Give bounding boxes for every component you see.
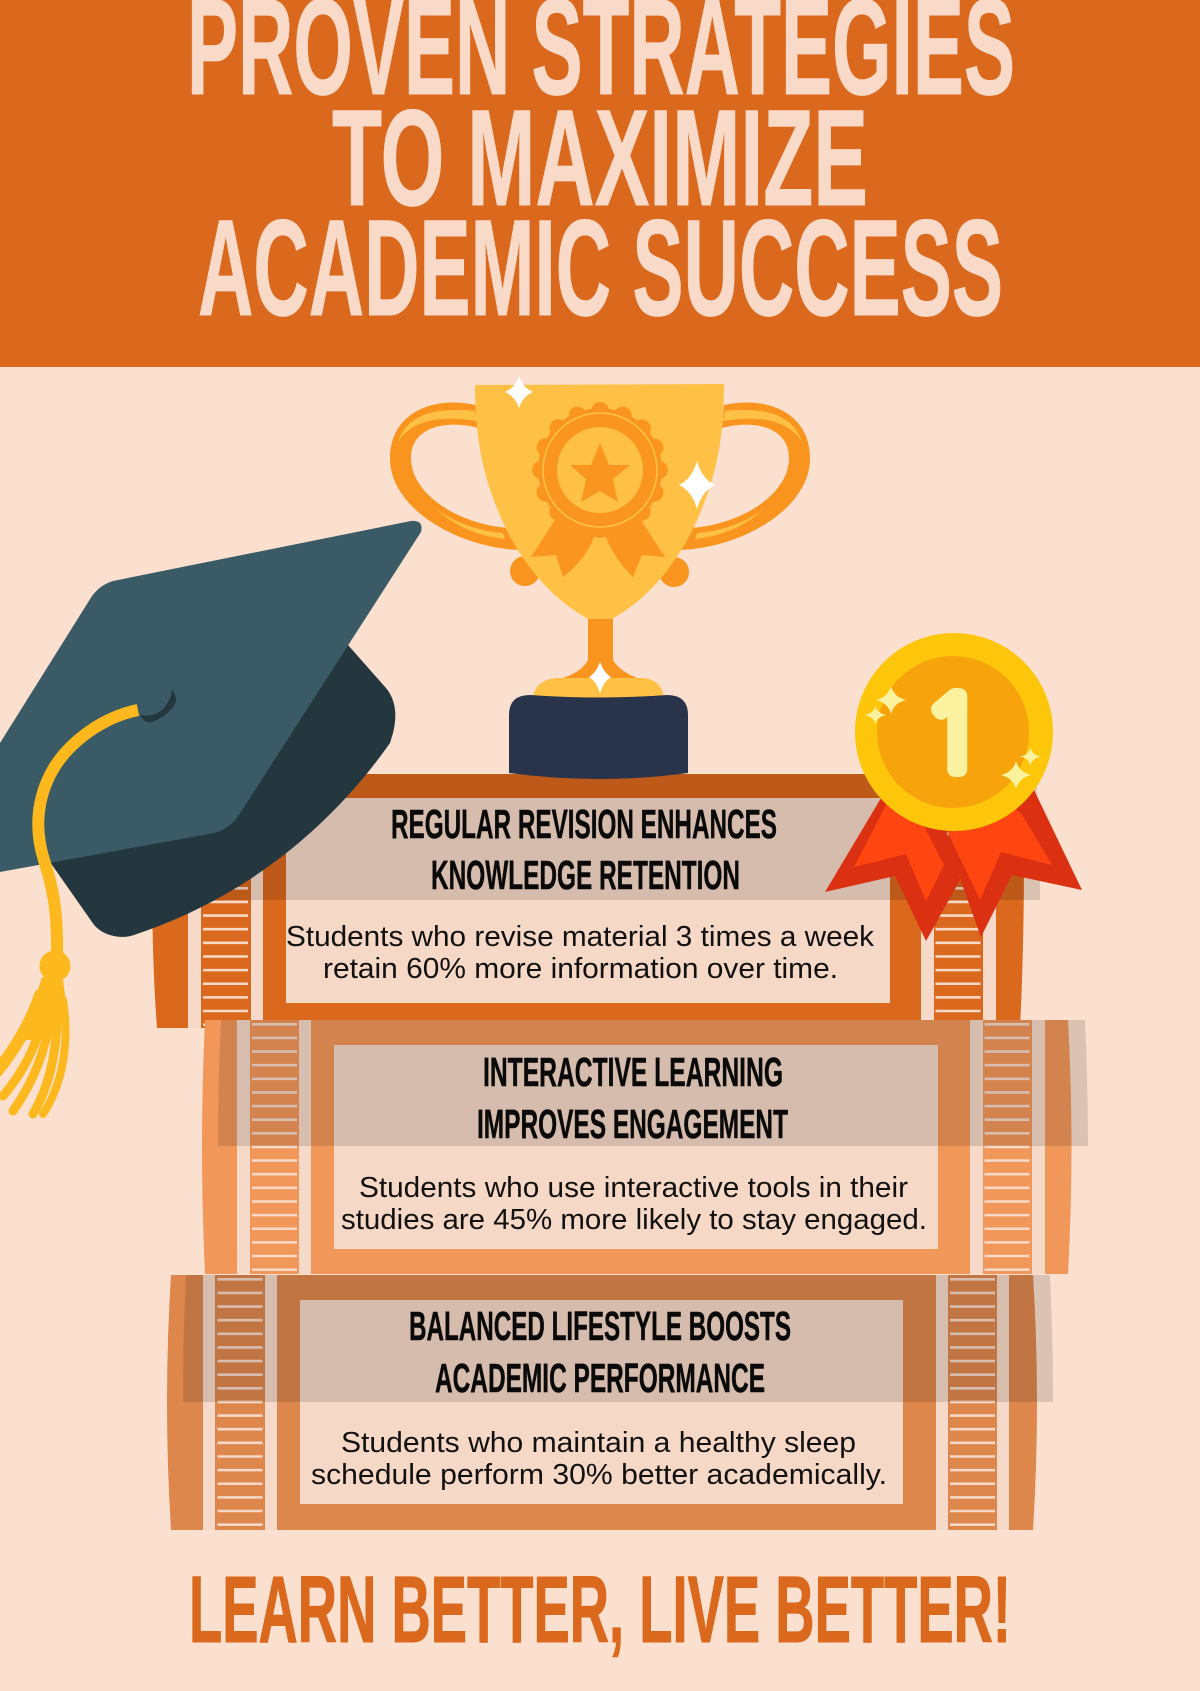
cap underside [50,645,395,937]
heading: regular revision: KNOWLEDGE RETENTION [431,852,740,898]
body text: balanced lifestyle: schedule perform 30% better academically. [311,1459,887,1491]
trophy handles [390,402,810,587]
medal ribbons [825,770,1082,941]
medal sparkles [865,686,1041,789]
heading: interactive learning: INTERACTIVE LEARNING [483,1049,783,1095]
heading: balanced lifestyle: BALANCED LIFESTYLE BOOSTS [409,1303,791,1349]
trophy base [509,695,688,779]
icon: gold medal [825,633,1082,941]
medal disc [855,633,1053,831]
heading: regular revision: REGULAR REVISION ENHANCES [391,801,777,847]
header banner [0,0,1200,367]
medal number: 1 [923,683,985,785]
heading: regular revision [391,801,777,898]
title [187,0,1015,345]
body text: regular revision: Students who revise material 3 times a week [286,921,875,953]
body text: balanced lifestyle: Students who maintain a healthy sleep [341,1427,856,1459]
trophy stem and foot [560,615,640,679]
body text: regular revision [286,921,875,985]
heading: balanced lifestyle [409,1303,791,1401]
book 3: balanced lifestyle [167,1275,1053,1530]
heading: balanced lifestyle: ACADEMIC PERFORMANCE [435,1355,765,1401]
trophy cup [475,384,724,619]
body text: regular revision: retain 60% more information over time. [323,953,838,985]
heading: interactive learning [477,1049,788,1147]
cap button [140,689,176,722]
cap board [0,521,422,872]
trophy sparkles [505,376,715,693]
tassel [0,710,138,1114]
body text: balanced lifestyle [311,1427,887,1491]
book 2: interactive learning [202,1020,1088,1274]
body text: interactive learning [341,1172,927,1236]
icon: graduation cap [0,521,422,1114]
heading: interactive learning: IMPROVES ENGAGEMENT [477,1101,788,1147]
cup rosette badge [531,408,665,577]
body text: interactive learning: Students who use interactive tools in their [359,1172,908,1204]
icon: trophy [390,376,810,779]
book 1: regular revision [152,774,1040,1028]
body text: interactive learning: studies are 45% more likely to stay engaged. [341,1204,927,1236]
